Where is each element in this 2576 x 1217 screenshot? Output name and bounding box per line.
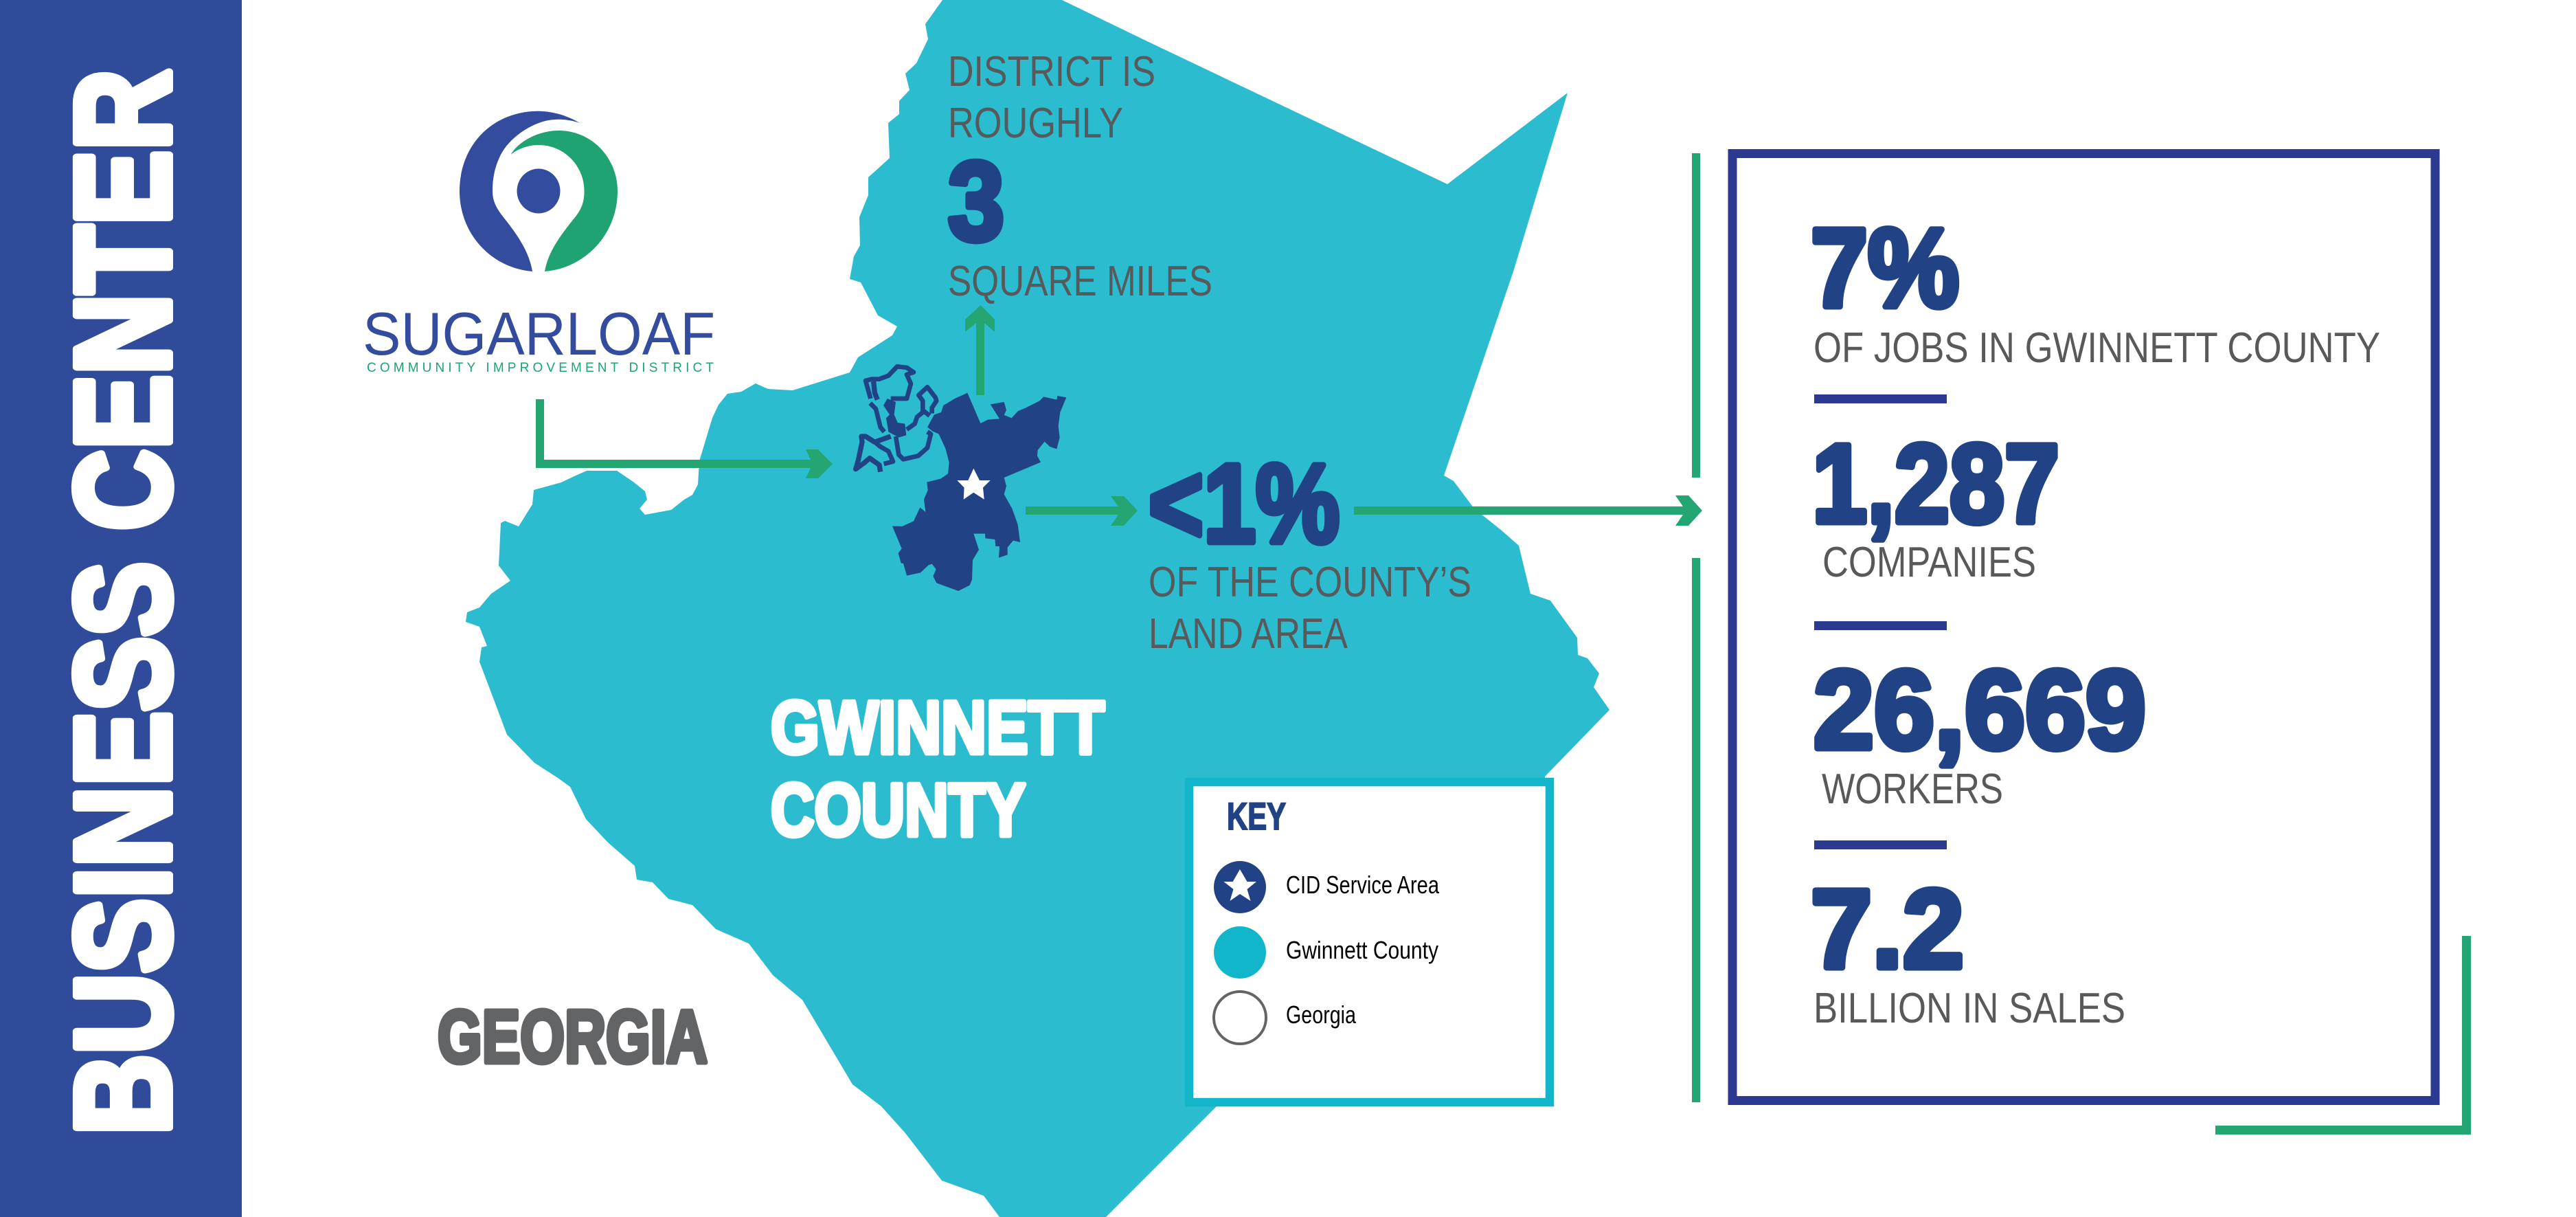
arrow: district to land area bbox=[1026, 496, 1138, 526]
text block: land area share bbox=[1149, 440, 1471, 658]
green bracket: upper left stats line bbox=[1692, 153, 1700, 478]
stat: workers: WORKERS bbox=[1822, 766, 2003, 813]
text block: district size: ROUGHLY bbox=[948, 100, 1123, 147]
green bracket: lower left stats line bbox=[1692, 558, 1700, 1102]
key item: georgia bbox=[1214, 992, 1357, 1044]
arrow: logo to district bbox=[536, 399, 833, 478]
logo icon: map pin bbox=[460, 111, 618, 271]
text block: land area share: OF THE COUNTY’S bbox=[1149, 559, 1471, 606]
icon: service area star bbox=[957, 469, 991, 500]
key item: gwinnett county bbox=[1214, 926, 1438, 979]
stat: companies bbox=[1812, 421, 2059, 586]
text block: district size: 3 bbox=[948, 138, 1004, 264]
text block: land area share: LAND AREA bbox=[1149, 610, 1348, 658]
stat: share of jobs: OF JOBS IN GWINNETT COUNTY bbox=[1814, 324, 2380, 372]
arrow: district to square miles bbox=[965, 305, 995, 395]
green bracket: bottom right corner bbox=[2215, 936, 2471, 1135]
key item: gwinnett county: Gwinnett County bbox=[1286, 936, 1438, 964]
label: georgia: GEORGIA bbox=[438, 995, 708, 1079]
logo wordmark: SUGARLOAF bbox=[363, 300, 715, 368]
stat: companies: 1,287 bbox=[1812, 421, 2059, 546]
label: gwinnett county bbox=[771, 686, 1105, 852]
map: cid service area bbox=[856, 366, 1066, 591]
stat: workers: 26,669 bbox=[1814, 647, 2146, 772]
logo: sugarloaf cid bbox=[363, 111, 715, 375]
stat: sales bbox=[1811, 866, 2125, 1032]
text block: district size: DISTRICT IS bbox=[948, 48, 1155, 96]
label: gwinnett county: COUNTY bbox=[771, 768, 1026, 852]
district main shape bbox=[856, 366, 1066, 591]
key item: cid service area bbox=[1214, 861, 1440, 913]
stat: sales: 7.2 bbox=[1811, 866, 1964, 992]
stat: share of jobs bbox=[1811, 205, 2380, 372]
key item: cid service area: CID Service Area bbox=[1286, 871, 1440, 899]
text block: district size: SQUARE MILES bbox=[948, 258, 1212, 305]
panel: stats box bbox=[1732, 154, 2435, 1101]
label: gwinnett county: GWINNETT bbox=[771, 686, 1105, 770]
text block: district size bbox=[948, 48, 1212, 305]
logo tagline: COMMUNITY IMPROVEMENT DISTRICT bbox=[367, 361, 714, 375]
panel: left title band bbox=[0, 0, 242, 1217]
stat: companies: COMPANIES bbox=[1822, 539, 2036, 586]
stat: sales: BILLION IN SALES bbox=[1814, 985, 2125, 1032]
stat: share of jobs: 7% bbox=[1811, 205, 1959, 331]
key item: georgia: Georgia bbox=[1286, 1001, 1357, 1029]
arrow: land area to stats bbox=[1354, 495, 1702, 526]
map: gwinnett county shape bbox=[466, 0, 1609, 1217]
panel: map key bbox=[1189, 782, 1550, 1102]
text block: land area share: <1% bbox=[1149, 440, 1340, 566]
key heading: KEY bbox=[1227, 794, 1286, 838]
